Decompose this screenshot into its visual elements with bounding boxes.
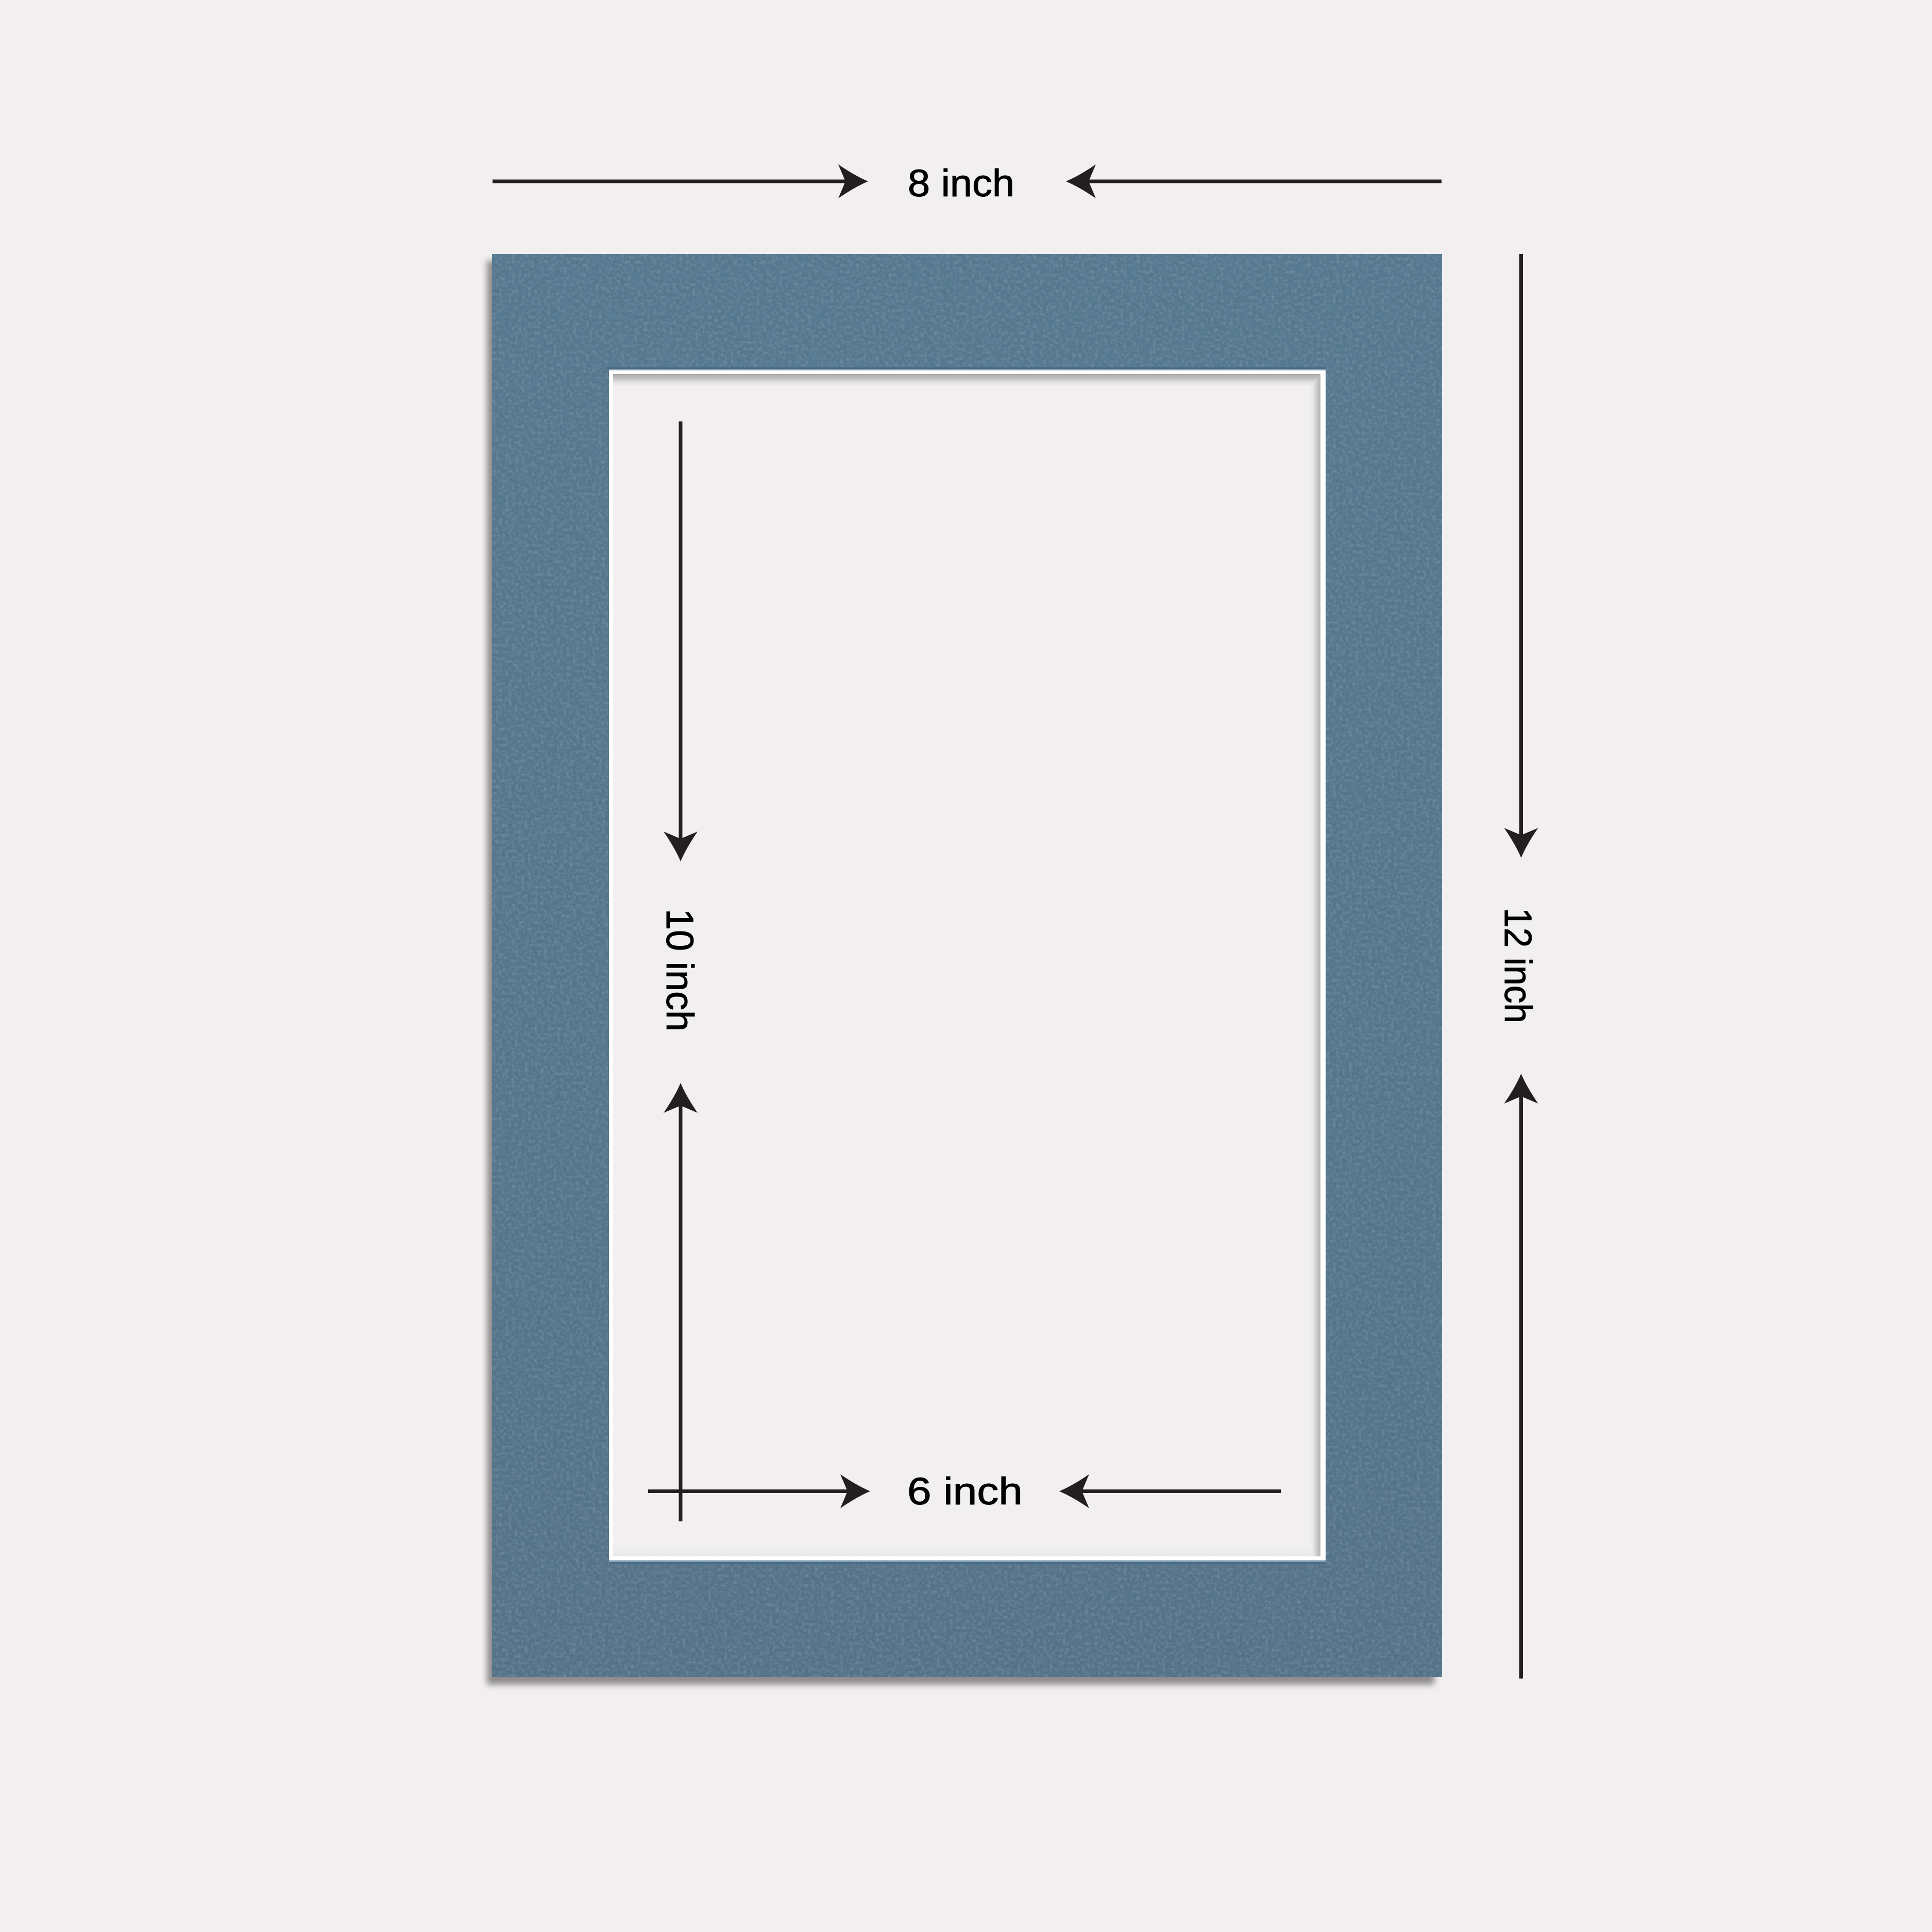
dimension: outer width 8 inch	[493, 162, 1442, 205]
arrow: left-pointing, outer width	[1066, 164, 1442, 198]
label: 8 inch: 8 inch	[908, 162, 1014, 205]
dimension: window height 10 inch	[658, 421, 701, 1521]
dimension: outer height 12 inch	[1497, 254, 1539, 1679]
label: 12 inch: 12 inch	[1497, 908, 1539, 1023]
mat surface	[492, 254, 1442, 1677]
arrow: right-pointing, outer width	[493, 164, 868, 198]
window cut shading	[606, 367, 1326, 1564]
window white bevel	[609, 370, 1326, 1560]
label: 10 inch: 10 inch	[658, 909, 701, 1031]
arrow: left-pointing, window width	[1059, 1475, 1281, 1509]
arrow: down-pointing, window height	[664, 421, 698, 861]
dimension: window width 6 inch	[648, 1470, 1281, 1513]
mat drop shadow	[487, 261, 1434, 1685]
arrow: up-pointing, window height	[664, 1083, 698, 1521]
label: 6 inch: 6 inch	[907, 1470, 1023, 1513]
arrow: up-pointing, outer height	[1504, 1074, 1538, 1679]
window opening	[613, 374, 1320, 1556]
photo mat board	[487, 254, 1442, 1685]
arrow: down-pointing, outer height	[1504, 254, 1538, 858]
window inner shadows	[613, 374, 1320, 1556]
arrow: right-pointing, window width	[648, 1475, 870, 1509]
mat paper texture	[492, 254, 1442, 1677]
